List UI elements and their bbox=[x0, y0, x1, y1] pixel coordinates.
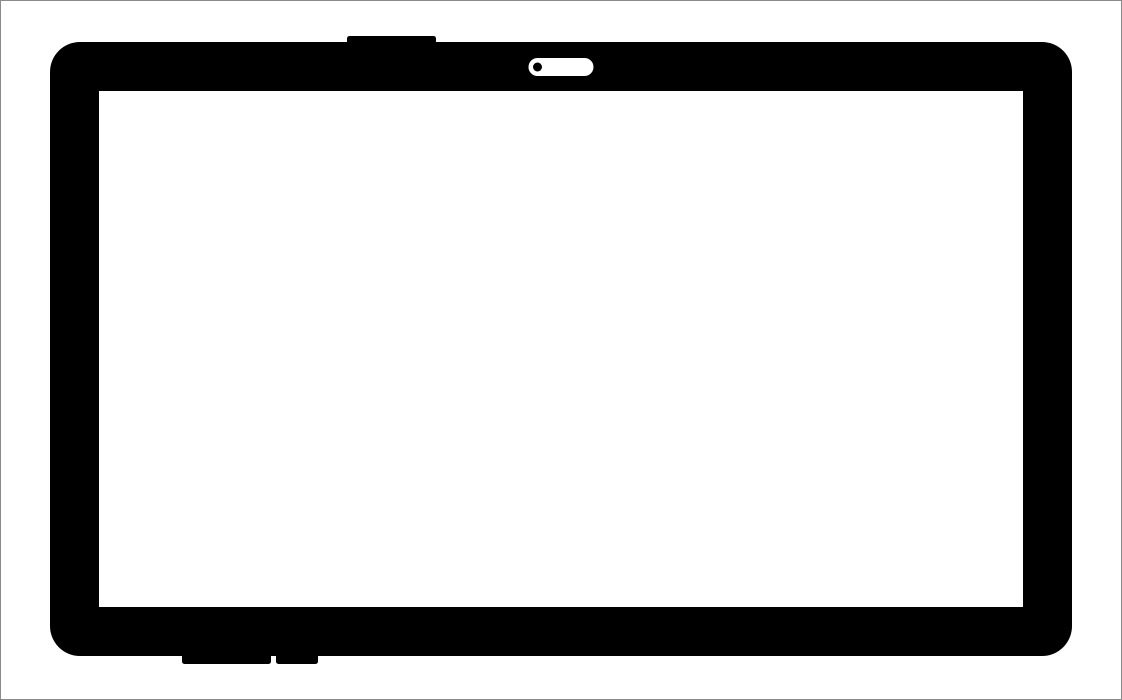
top power button bbox=[347, 36, 436, 48]
bottom left button bbox=[182, 650, 271, 664]
camera lens bbox=[533, 62, 542, 72]
bottom right button bbox=[276, 650, 318, 664]
tablet bezel bbox=[50, 42, 1072, 656]
blank screen bbox=[99, 91, 1023, 607]
camera pill bbox=[528, 58, 594, 76]
